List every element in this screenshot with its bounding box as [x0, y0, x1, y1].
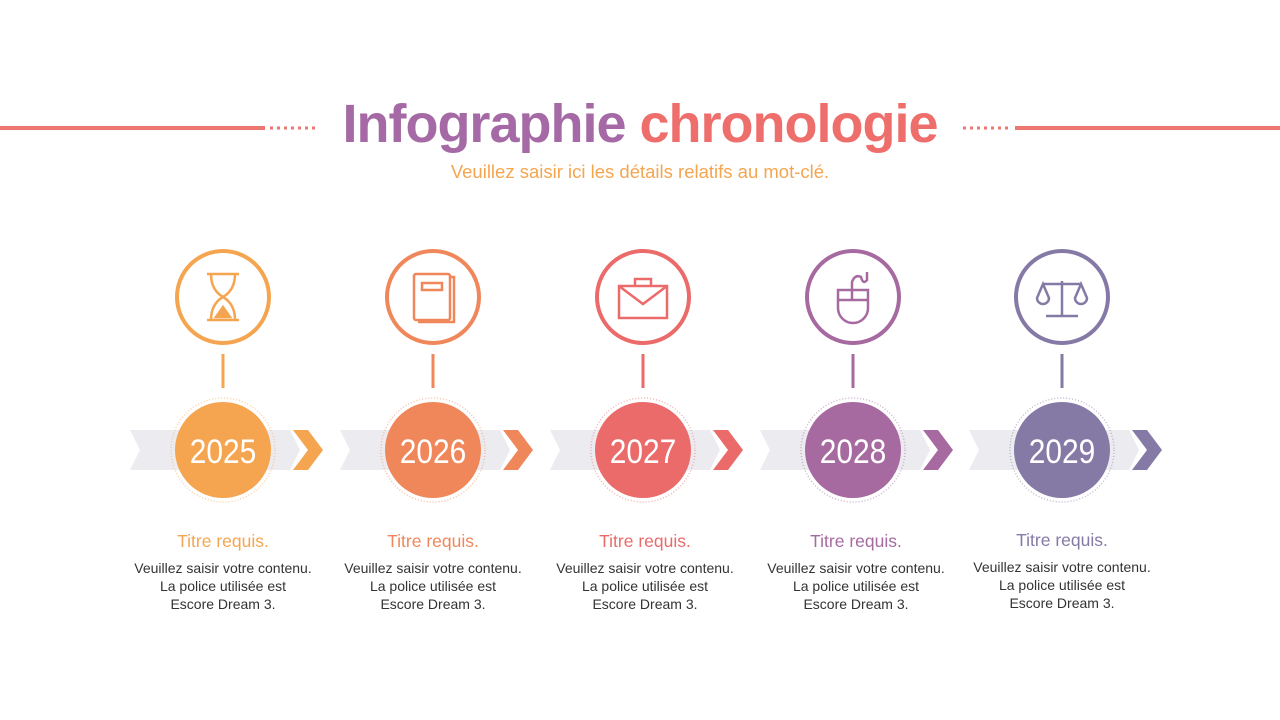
text: Escore Dream 3. [170, 596, 276, 612]
text block 2028 [767, 531, 945, 612]
text: Titre requis. [387, 531, 479, 551]
milestone 2025: 2025 [190, 432, 256, 470]
text block 2029 [973, 530, 1151, 611]
text: Titre requis. [177, 531, 269, 551]
text: Titre requis. [1016, 530, 1108, 550]
text block 2026 [344, 531, 522, 612]
milestone 2026 [340, 251, 533, 502]
text: La police utilisée est [582, 578, 708, 594]
icon: mouse [838, 272, 868, 323]
text: La police utilisée est [999, 577, 1125, 593]
subtitle: Veuillez saisir ici les détails relatifs au mot-clé. [451, 161, 829, 182]
text: Veuillez saisir votre contenu. [556, 560, 734, 576]
text: Titre requis. [810, 531, 902, 551]
text block 2027 [556, 531, 734, 612]
text: Escore Dream 3. [1009, 595, 1115, 611]
title: Infographie chronologie [342, 94, 938, 154]
text: La police utilisée est [160, 578, 286, 594]
milestone 2027: 2027 [610, 432, 676, 470]
icon: scales [1037, 281, 1087, 316]
text block 2025 [134, 531, 312, 612]
text: Veuillez saisir votre contenu. [973, 559, 1151, 575]
icon: hourglass [207, 274, 239, 320]
milestone 2029: 2029 [1029, 432, 1095, 470]
text: Veuillez saisir votre contenu. [344, 560, 522, 576]
milestone 2029 [969, 251, 1162, 502]
milestone 2025 [130, 251, 323, 502]
text: La police utilisée est [370, 578, 496, 594]
milestone 2027 [550, 251, 743, 502]
text: Escore Dream 3. [592, 596, 698, 612]
icon: book [414, 274, 454, 322]
text: La police utilisée est [793, 578, 919, 594]
milestone 2028 [760, 251, 953, 502]
text: Veuillez saisir votre contenu. [134, 560, 312, 576]
milestone 2026: 2026 [400, 432, 466, 470]
text: Escore Dream 3. [380, 596, 486, 612]
text: Veuillez saisir votre contenu. [767, 560, 945, 576]
text: Titre requis. [599, 531, 691, 551]
icon: bag envelope [619, 279, 667, 318]
milestone 2028: 2028 [820, 432, 886, 470]
text: Escore Dream 3. [803, 596, 909, 612]
